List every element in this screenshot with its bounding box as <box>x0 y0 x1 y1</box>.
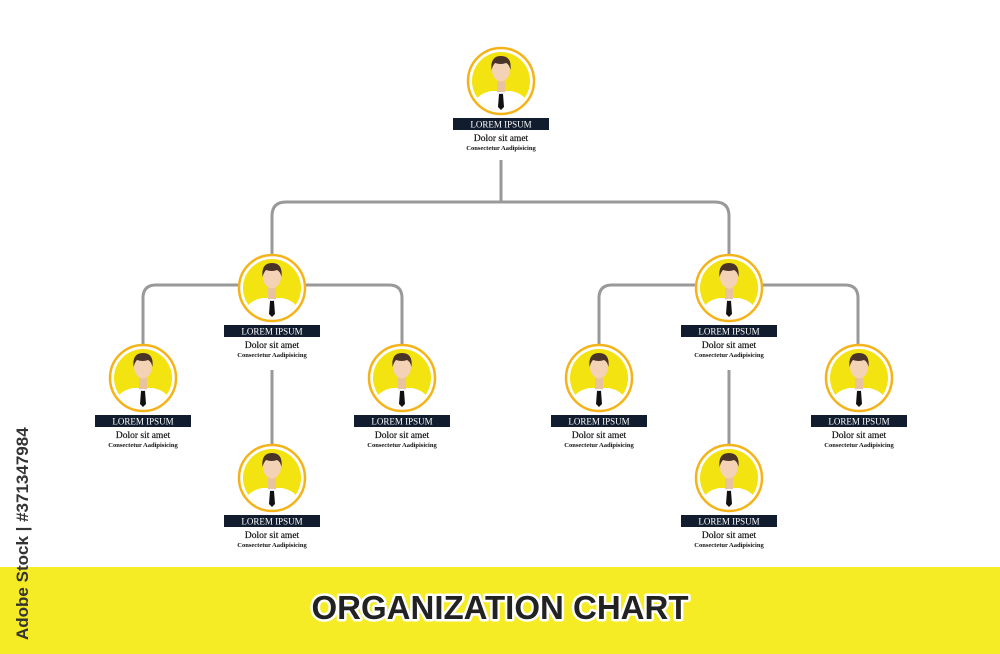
connector lines <box>143 160 858 445</box>
node: level3 c <box>551 345 647 449</box>
node: level4 right <box>681 445 777 549</box>
watermark side text: Adobe Stock | #371347984 <box>13 427 32 640</box>
node: level3 d <box>811 345 907 449</box>
node: level3 a <box>95 345 191 449</box>
node: level2 right <box>681 255 777 359</box>
node: level4 left <box>224 445 320 549</box>
node: level3 b <box>354 345 450 449</box>
title: ORGANIZATION CHART <box>311 589 689 626</box>
footer band <box>0 567 1000 654</box>
node: level2 left <box>224 255 320 359</box>
node: top <box>453 48 549 152</box>
